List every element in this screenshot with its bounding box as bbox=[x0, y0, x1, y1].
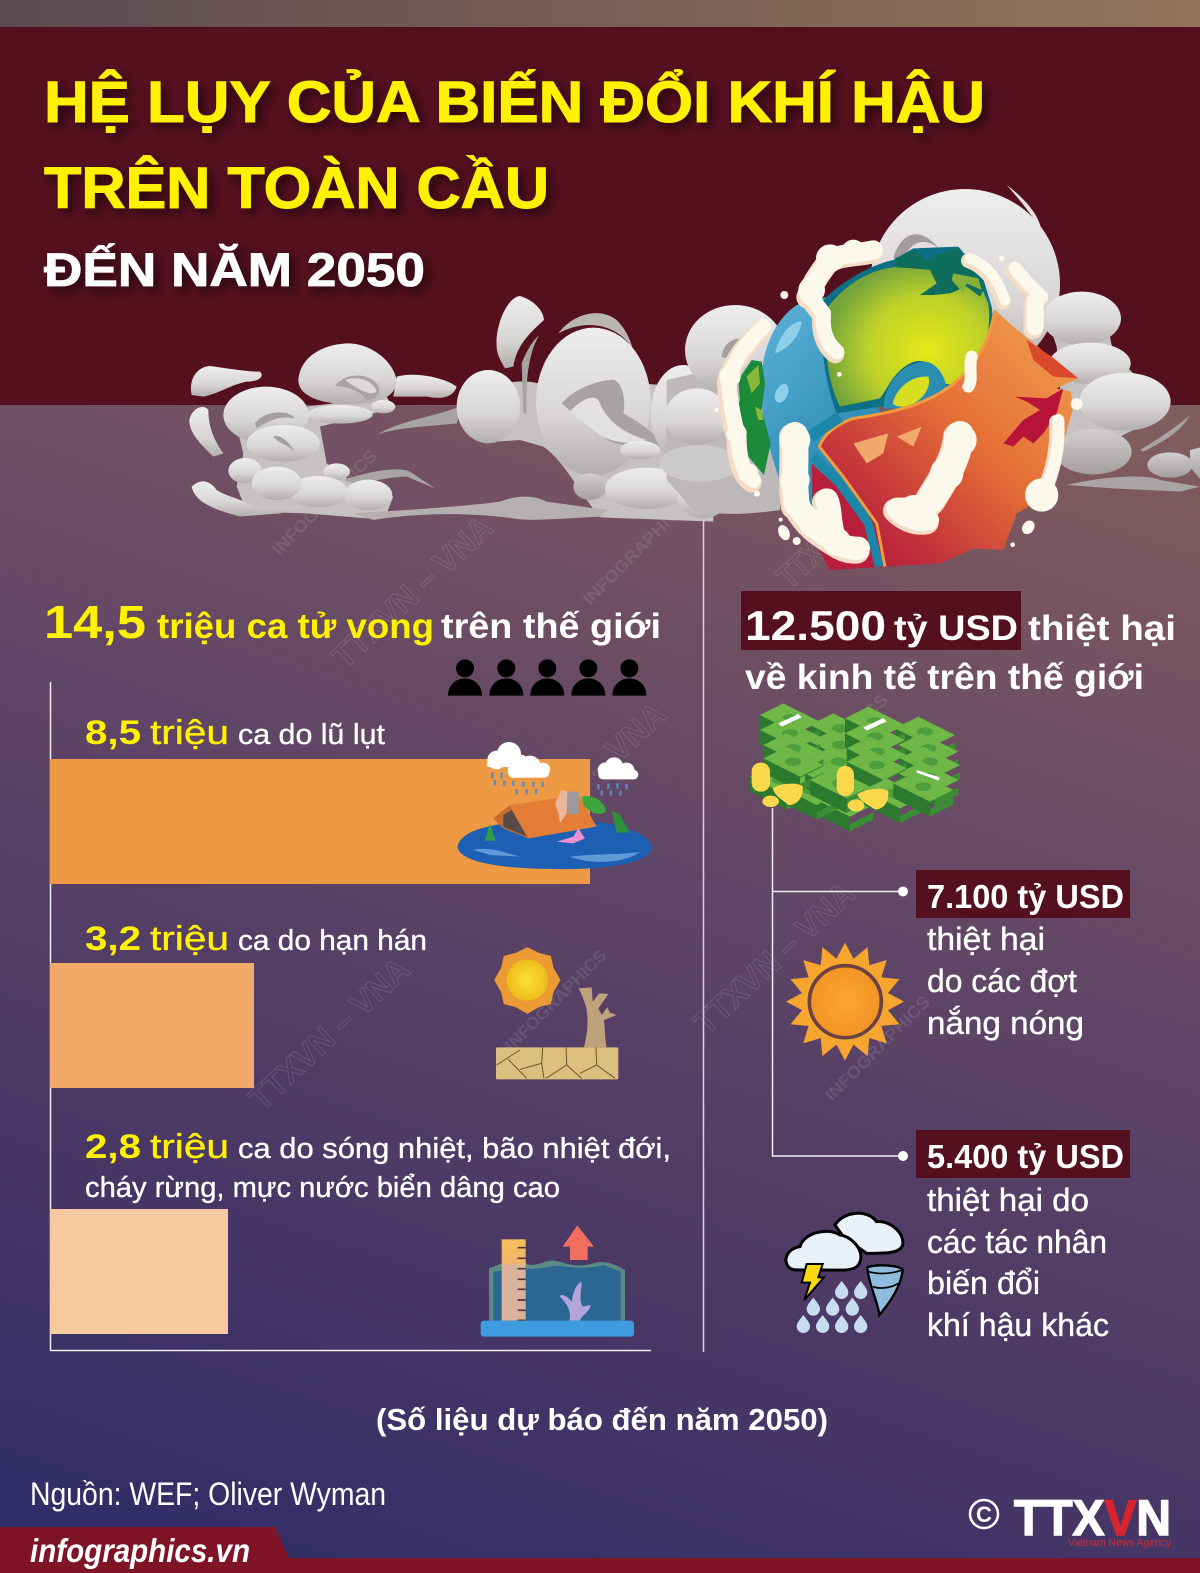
left panel heading: deaths: triệu ca tử vong bbox=[157, 607, 434, 646]
icon: storm bbox=[786, 1213, 903, 1333]
footnote: (Số liệu dự báo đến năm 2050) bbox=[376, 1402, 828, 1437]
tall cloud bbox=[457, 296, 544, 443]
bar: drought bbox=[50, 963, 254, 1088]
icon: blazing sun bbox=[786, 943, 904, 1061]
cloud base silhouette: left cluster bbox=[237, 397, 393, 518]
left panel heading: deaths: 14,5 bbox=[44, 596, 146, 648]
title: TRÊN TOÀN CẦU bbox=[44, 156, 549, 221]
smoke clouds: left bbox=[189, 296, 730, 522]
callout: other climate damage: các tác nhân bbox=[927, 1224, 1107, 1260]
watermarks: TTXVN – VNA bbox=[495, 695, 673, 865]
cloud base silhouette: central mass bbox=[467, 381, 713, 522]
cloud base silhouette: lower left bbox=[667, 367, 780, 514]
swirl cloud bbox=[536, 313, 660, 476]
label: heat, storm, fire, sea level: cháy rừng, mực nước biển dâng cao bbox=[85, 1172, 560, 1204]
lava continent bbox=[819, 310, 1078, 567]
breakdown connector lines bbox=[772, 808, 908, 1161]
logo: TTXVN: Vietnam News Agency bbox=[1068, 1537, 1171, 1549]
foam bbox=[728, 250, 1059, 548]
left panel heading: deaths: trên thế giới bbox=[441, 607, 661, 646]
callout: heatwave damage bbox=[916, 870, 1130, 1041]
callout: other climate damage: thiệt hại do bbox=[927, 1182, 1089, 1218]
smoke clouds: right and behind earth bbox=[660, 185, 1200, 514]
label: heat, storm, fire, sea level bbox=[85, 1128, 671, 1204]
earth illustration bbox=[714, 240, 1083, 570]
watermarks: TTXVN – VNA bbox=[325, 508, 500, 675]
label: flood: 8,5 bbox=[85, 714, 141, 752]
watermarks: INFOGRAPHICS bbox=[268, 446, 381, 559]
right panel heading: economic damage: 12.500 bbox=[745, 602, 886, 649]
top land bbox=[826, 260, 989, 407]
cloud base silhouette: right cluster bbox=[1050, 320, 1153, 467]
label: drought: triệu bbox=[150, 920, 229, 958]
callout: heatwave damage: do các đợt bbox=[927, 963, 1077, 999]
label: drought bbox=[85, 920, 427, 958]
watermarks: INFOGRAPHICS bbox=[821, 992, 934, 1105]
watermarks: INFOGRAPHICS bbox=[310, 760, 423, 873]
panel divider bbox=[702, 520, 704, 1352]
ocean bbox=[761, 293, 893, 567]
label: flood bbox=[85, 714, 385, 752]
watermarks: TTXVN – VNA bbox=[242, 950, 417, 1117]
title: ĐẾN NĂM 2050 bbox=[44, 243, 425, 296]
rivers bbox=[819, 310, 995, 567]
title bbox=[44, 70, 985, 296]
callout: heatwave damage: thiệt hại bbox=[927, 921, 1045, 957]
logo: TTXVN: C bbox=[976, 1502, 992, 1527]
right panel heading: economic damage: về kinh tế trên thế giới bbox=[745, 658, 1144, 697]
lake bbox=[883, 362, 948, 409]
watermarks: TTXVN – VNA bbox=[770, 452, 919, 595]
title: HỆ LỤY CỦA BIẾN ĐỔI KHÍ HẬU bbox=[44, 70, 985, 135]
chart axes bbox=[50, 682, 651, 1350]
callout: heatwave damage: 7.100 tỷ USD bbox=[927, 878, 1124, 915]
right panel heading: economic damage bbox=[741, 591, 1176, 697]
land outline bbox=[822, 247, 993, 413]
label: flood: ca do lũ lụt bbox=[238, 719, 385, 751]
top strip bbox=[0, 0, 1200, 27]
label: drought: 3,2 bbox=[85, 920, 141, 958]
icon: sea level rise bbox=[481, 1225, 634, 1337]
right panel heading: economic damage: tỷ USD bbox=[894, 609, 1018, 648]
watermarks bbox=[242, 446, 934, 1117]
callout: other climate damage: 5.400 tỷ USD bbox=[927, 1138, 1124, 1175]
label: heat, storm, fire, sea level: 2,8 bbox=[85, 1128, 141, 1166]
icon: money stacks bbox=[750, 703, 960, 831]
label: drought: ca do hạn hán bbox=[238, 925, 427, 957]
icon: flooded house bbox=[457, 742, 652, 869]
label: heat, storm, fire, sea level: triệu bbox=[150, 1128, 229, 1166]
watermarks: TTXVN – VNA bbox=[687, 874, 862, 1041]
footer band with site tab bbox=[0, 1527, 1200, 1573]
left green land bbox=[728, 360, 771, 475]
watermarks: INFOGRAPHICS bbox=[579, 496, 692, 609]
callout: other climate damage: khí hậu khác bbox=[927, 1307, 1109, 1343]
callout: other climate damage: biến đổi bbox=[927, 1265, 1040, 1301]
right panel heading: economic damage: thiệt hại bbox=[1028, 609, 1176, 648]
bar: other causes bbox=[50, 1209, 228, 1334]
label: flood: triệu bbox=[150, 714, 229, 752]
header band bbox=[0, 27, 1200, 405]
source: Nguồn: WEF; Oliver Wyman bbox=[30, 1476, 386, 1512]
foam shadow bbox=[727, 252, 1057, 551]
icon: five people bbox=[448, 659, 646, 696]
footer band with site tab: infographics.vn bbox=[30, 1532, 250, 1569]
callout: heatwave damage: nắng nóng bbox=[927, 1005, 1084, 1041]
callout: other climate damage bbox=[916, 1130, 1130, 1343]
label: heat, storm, fire, sea level: ca do sóng nhiệt, bão nhiệt đới, bbox=[238, 1133, 671, 1165]
icon: sun and dry land bbox=[495, 948, 618, 1079]
bar: flood bbox=[50, 759, 590, 884]
logo: TTXVN: TTXVN bbox=[1014, 1490, 1171, 1546]
watermarks: INFOGRAPHICS bbox=[779, 690, 892, 803]
watermarks: INFOGRAPHICS bbox=[501, 946, 610, 1055]
left panel heading: deaths bbox=[44, 596, 661, 648]
